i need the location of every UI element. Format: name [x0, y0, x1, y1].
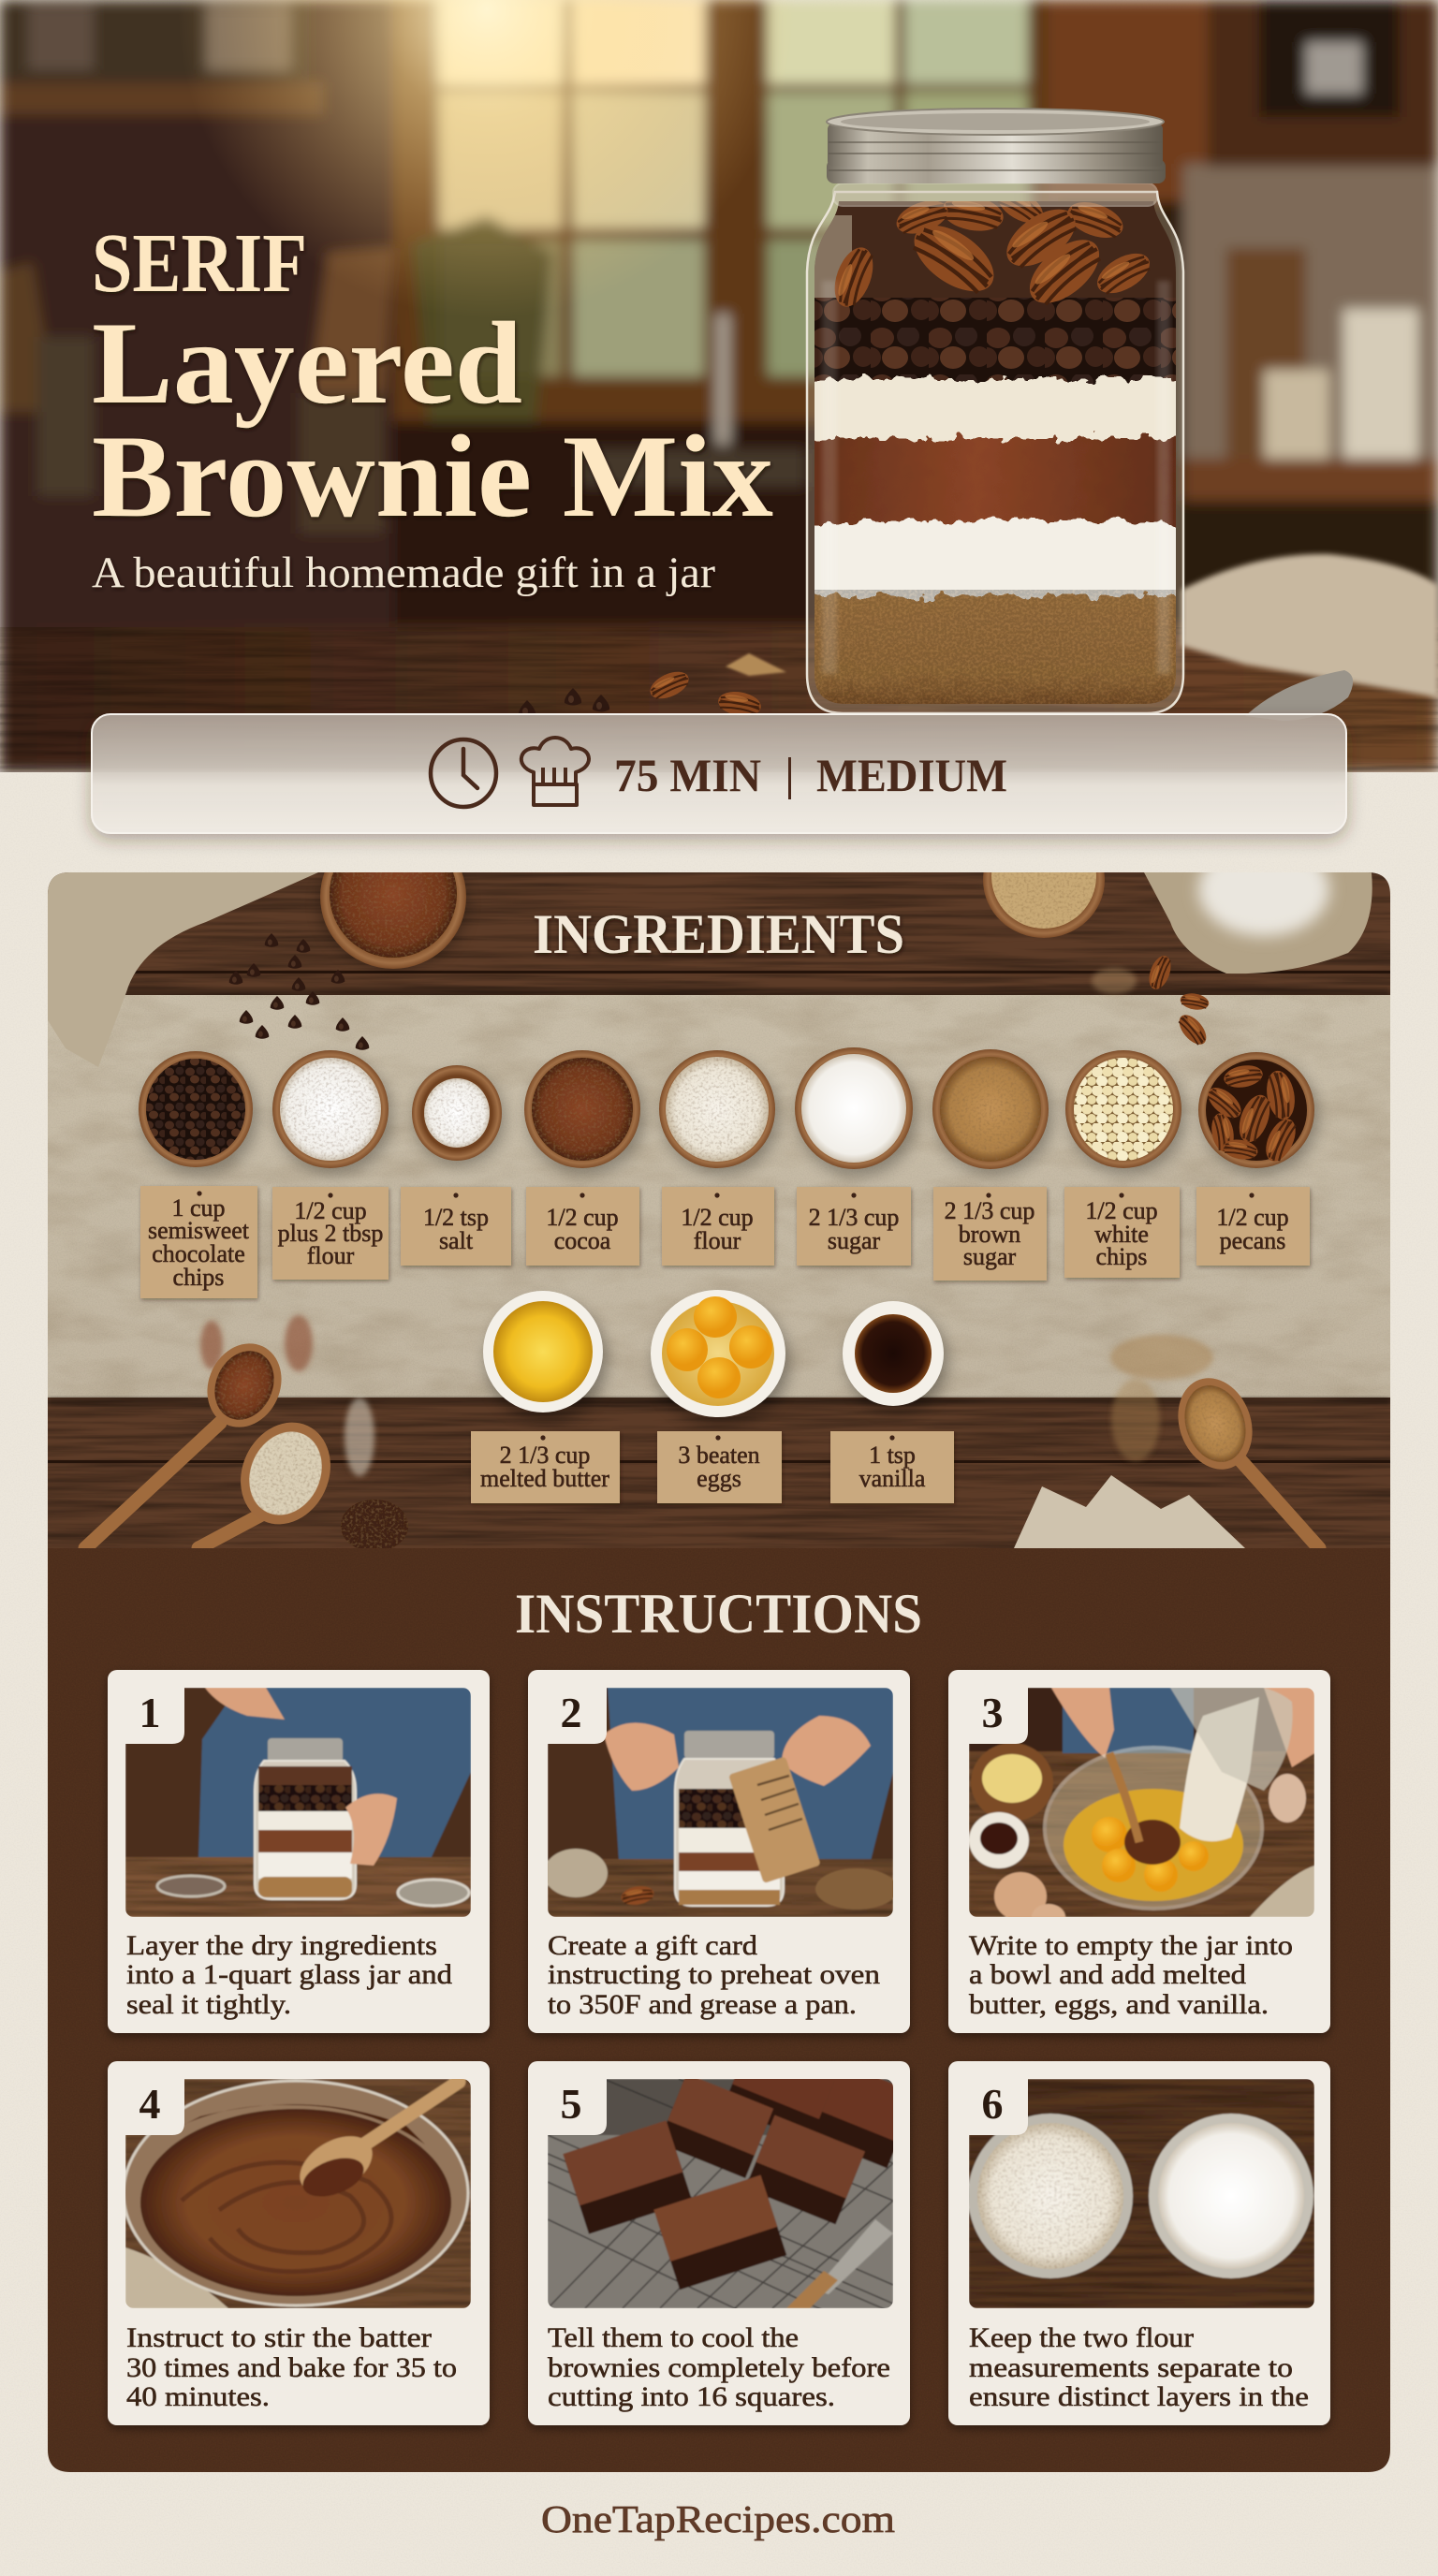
icon: clock	[431, 739, 496, 807]
bowl: vanilla	[843, 1301, 947, 1412]
icon: chef hat	[521, 738, 589, 805]
label: chocolate chips	[140, 1186, 257, 1298]
jar contents	[796, 182, 1198, 718]
label: melted butter	[471, 1431, 620, 1503]
label: sugar: 2 1/3 cup	[809, 1204, 899, 1231]
step text: seal it tightly.	[126, 1989, 291, 2020]
title line: Brownie Mix: Brownie Mix	[92, 412, 773, 542]
spoon	[1245, 670, 1353, 721]
kitchen background	[0, 0, 1438, 772]
scattered chocolate chips	[229, 933, 369, 1050]
bowl: sugar	[795, 1047, 917, 1177]
label: white chips: 1/2 cup	[1085, 1197, 1158, 1224]
label: sugar: sugar	[828, 1227, 880, 1254]
photo: mixing wet and dry	[969, 1683, 1314, 1930]
difficulty text: MEDIUM	[816, 749, 1007, 801]
label: salt: 1/2 tsp	[423, 1204, 489, 1231]
label: chocolate chips: semisweet	[148, 1217, 250, 1244]
bowl: melted butter	[483, 1291, 607, 1422]
step text: Write to empty the jar into	[969, 1930, 1293, 1961]
jar	[796, 109, 1198, 718]
label: chocolate chips: 1 cup	[171, 1194, 226, 1222]
step text: brownies completely before	[548, 2352, 890, 2383]
label: beaten eggs: eggs	[697, 1465, 741, 1492]
napkin	[1014, 1475, 1245, 1548]
step text: measurements separate to	[969, 2352, 1293, 2383]
title block	[92, 217, 773, 597]
step 2 card	[528, 1670, 910, 2033]
step number: 1	[139, 1689, 161, 1736]
label: white chips: white	[1094, 1221, 1149, 1248]
table grain	[0, 627, 1438, 772]
panel: ingredients	[48, 822, 1390, 1552]
step 4 card	[108, 2061, 490, 2425]
linen runner	[48, 988, 1390, 1405]
bowl: beaten eggs	[651, 1290, 789, 1426]
step text: butter, eggs, and vanilla.	[969, 1989, 1269, 2020]
metal lid	[827, 109, 1166, 183]
step text: Tell them to cool the	[548, 2322, 799, 2353]
step text: Layer the dry ingredients	[126, 1930, 437, 1961]
walnut	[341, 1500, 408, 1552]
label: chocolate chips: chips	[173, 1264, 224, 1291]
label: flour 1	[272, 1187, 389, 1280]
step number tab	[548, 2079, 607, 2135]
scattered pecans	[1092, 953, 1211, 1049]
label: chocolate chips: chocolate	[152, 1240, 245, 1267]
label: salt	[401, 1187, 511, 1266]
bowl: pecans	[1198, 1052, 1318, 1175]
heading: INGREDIENTS	[533, 903, 904, 965]
label: cocoa: 1/2 cup	[546, 1204, 619, 1231]
spoon: brown sugar	[1166, 1368, 1319, 1548]
label: flour 2: flour	[694, 1227, 741, 1254]
label: brown sugar	[933, 1187, 1047, 1281]
step number tab	[125, 1688, 184, 1744]
label: vanilla: 1 tsp	[869, 1442, 916, 1469]
bowl: flour 1	[272, 1050, 392, 1175]
time and difficulty bar	[92, 714, 1346, 833]
towel	[1181, 554, 1438, 697]
step text: into a 1-quart glass jar and	[126, 1959, 452, 1990]
step text: 30 times and bake for 35 to	[126, 2352, 457, 2383]
step number: 5	[560, 2080, 582, 2128]
step number: 6	[981, 2080, 1004, 2128]
step text: to 350F and grease a pan.	[548, 1989, 857, 2020]
glass highlights	[822, 281, 837, 674]
label: brown sugar: brown	[959, 1221, 1020, 1248]
label: flour 2	[662, 1187, 774, 1266]
footer website: OneTapRecipes.com	[541, 2497, 895, 2540]
step number tab	[125, 2079, 184, 2135]
step text: Keep the two flour	[969, 2322, 1194, 2353]
bowl: brown sugar	[932, 1049, 1052, 1175]
photo: layering the jar	[125, 1688, 471, 1917]
glass body	[807, 192, 1183, 713]
spoon: cocoa	[85, 1331, 295, 1548]
bowl: white chips	[1065, 1050, 1185, 1175]
label: white chips	[1064, 1187, 1180, 1278]
step 1 card	[108, 1670, 490, 2033]
step number tab	[548, 1688, 607, 1744]
step 3 card	[948, 1670, 1330, 2033]
label: salt: salt	[439, 1227, 474, 1254]
top-left cloth	[48, 872, 318, 1067]
title line: SERIF: SERIF	[92, 217, 307, 310]
step text: 40 minutes.	[126, 2381, 270, 2412]
label: beaten eggs: 3 beaten	[678, 1442, 760, 1469]
label: vanilla	[830, 1431, 954, 1503]
label: cocoa: cocoa	[554, 1227, 611, 1254]
bowl: salt	[412, 1065, 505, 1165]
label: pecans	[1196, 1187, 1310, 1266]
step text: Instruct to stir the batter	[126, 2322, 432, 2353]
title line: Layered: Layered	[92, 299, 522, 429]
label: vanilla: vanilla	[859, 1465, 926, 1492]
step text: instructing to preheat oven	[548, 1959, 880, 1990]
photo: batter in bowl	[124, 2079, 471, 2308]
step 6 card	[948, 2061, 1330, 2425]
label: white chips: chips	[1096, 1243, 1147, 1270]
label: melted butter: 2 1/3 cup	[500, 1442, 590, 1469]
label: flour 1: flour	[307, 1242, 355, 1269]
wood tabletop	[48, 872, 1390, 1548]
label: pecans: pecans	[1220, 1227, 1285, 1254]
top cocoa bowl	[320, 825, 466, 969]
label: flour 2: 1/2 cup	[681, 1204, 754, 1231]
step number: 2	[560, 1689, 582, 1736]
label: flour 1: 1/2 cup	[294, 1197, 367, 1224]
divider	[788, 757, 791, 799]
bowl: cocoa	[524, 1050, 644, 1175]
photo: gift tag	[544, 1688, 898, 1917]
step number: 3	[981, 1689, 1004, 1736]
photo: brownies on rack	[548, 2037, 917, 2313]
label: cocoa	[526, 1187, 639, 1266]
step text: ensure distinct layers in the	[969, 2381, 1309, 2412]
bowl: chocolate chips	[139, 1051, 257, 1175]
step text: a bowl and add melted	[969, 1959, 1246, 1990]
subtitle: A beautiful homemade gift in a jar	[92, 549, 715, 597]
time text: 75 MIN	[614, 749, 761, 801]
label: brown sugar: sugar	[963, 1243, 1016, 1270]
flour sack	[1144, 842, 1372, 973]
bowl: flour 2	[659, 1050, 779, 1175]
heading: INSTRUCTIONS	[515, 1583, 922, 1645]
photo: two flours	[968, 2079, 1314, 2308]
label: pecans: 1/2 cup	[1216, 1204, 1289, 1231]
spoon: flour	[198, 1408, 346, 1548]
top sugar bowl	[983, 822, 1105, 938]
panel background	[48, 1548, 1390, 2472]
label: beaten eggs	[657, 1431, 782, 1503]
step number tab	[969, 2079, 1028, 2135]
table garnish	[519, 653, 786, 719]
step number: 4	[139, 2080, 161, 2128]
step 5 card	[528, 2037, 917, 2425]
spilled powders	[200, 1315, 1213, 1476]
step number tab	[969, 1688, 1028, 1744]
step text: Create a gift card	[548, 1930, 757, 1961]
sunlight glare	[195, 0, 766, 300]
label: flour 1: plus 2 tbsp	[278, 1220, 383, 1247]
label: sugar	[797, 1187, 911, 1266]
step text: cutting into 16 squares.	[548, 2381, 835, 2412]
label: melted butter: melted butter	[480, 1465, 609, 1492]
hero photo: kitchen with jar	[0, 0, 1438, 772]
label: brown sugar: 2 1/3 cup	[945, 1197, 1034, 1224]
